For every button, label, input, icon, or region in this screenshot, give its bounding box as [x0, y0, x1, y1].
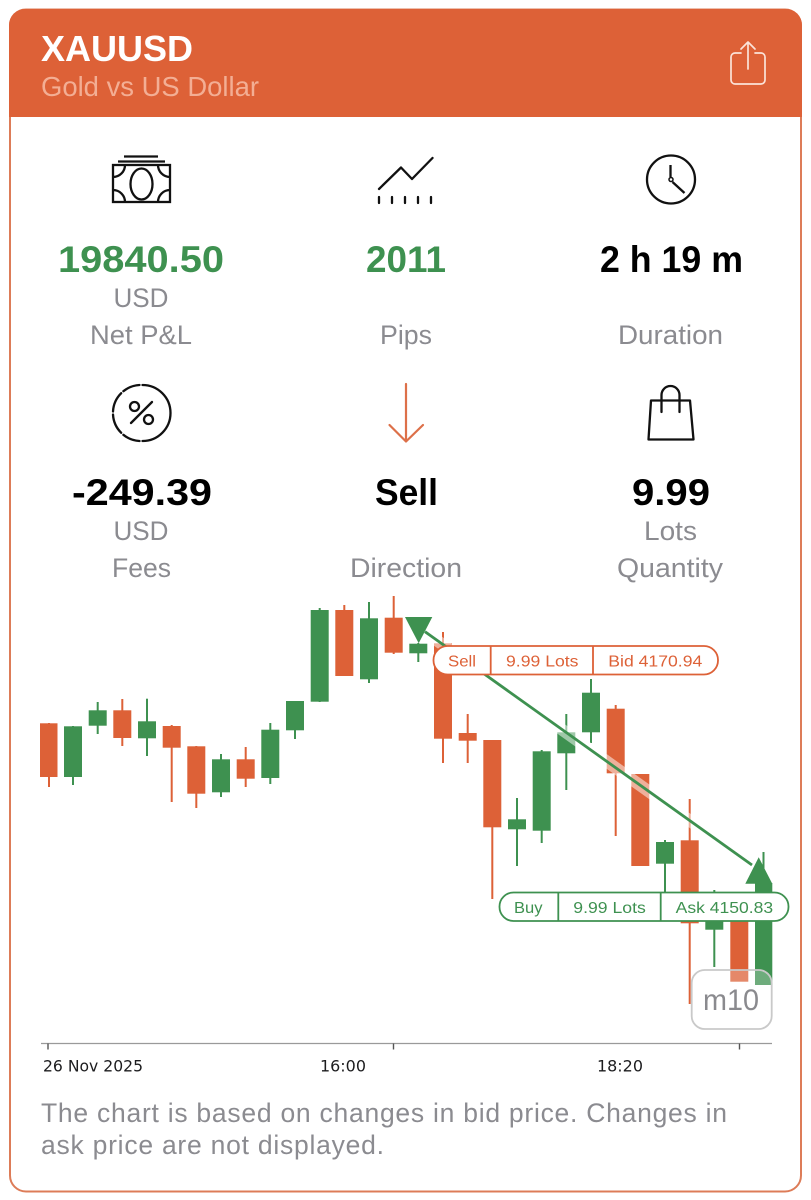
footnote: ask price are not displayed.	[41, 1130, 384, 1160]
time axis: 16:00	[320, 1058, 366, 1076]
metric: direction: Direction	[350, 553, 462, 583]
marker: entry triangle	[405, 617, 432, 643]
label: buy order: 9.99 Lots	[573, 900, 646, 917]
metric: net P&L: USD	[114, 283, 168, 313]
icon: share	[731, 42, 765, 84]
icon: banknote	[113, 156, 170, 202]
metric: quantity: Quantity	[617, 553, 724, 583]
label: sell order: Bid 4170.94	[608, 654, 703, 670]
timeframe badge: m10	[703, 984, 759, 1017]
metric: direction	[350, 472, 462, 583]
time axis: 26 Nov 2025	[43, 1058, 143, 1076]
metric: net P&L: 19840.50	[58, 239, 224, 280]
subtitle: Gold vs US Dollar	[41, 71, 259, 102]
metric: net P&L: Net P&L	[90, 320, 192, 350]
icon: percent	[113, 385, 170, 441]
header band	[9, 9, 802, 117]
metric: direction: Sell	[375, 472, 438, 513]
bullish candles	[64, 602, 772, 985]
label: sell order	[434, 646, 718, 674]
candlestick chart	[40, 596, 788, 1029]
time axis	[41, 1044, 772, 1076]
label: sell order: 9.99 Lots	[506, 654, 579, 670]
label: sell order: Sell	[448, 654, 476, 670]
metric: fees: USD	[114, 516, 168, 546]
label: buy order: Ask 4150.83	[676, 900, 774, 917]
metric: quantity	[617, 472, 724, 583]
metric: quantity: 9.99	[632, 472, 710, 513]
metric: fees	[72, 472, 212, 583]
metric: quantity: Lots	[644, 516, 697, 546]
icon: line chart	[379, 158, 432, 203]
bearish candles	[40, 596, 748, 1004]
trade line highlight	[425, 632, 752, 865]
trade line	[425, 632, 752, 865]
icon: down arrow	[390, 384, 423, 442]
metric: pips	[366, 239, 446, 350]
metric: pips: 2011	[366, 239, 446, 280]
metric: net P&L	[58, 239, 224, 350]
time axis: 18:20	[597, 1058, 643, 1076]
metric: fees: Fees	[112, 553, 171, 583]
icon: shopping bag	[648, 386, 694, 440]
label: buy order: Buy	[514, 900, 543, 917]
footnote	[41, 1098, 727, 1160]
metric: fees: -249.39	[72, 472, 212, 513]
timeframe badge	[692, 970, 772, 1029]
metric: duration: Duration	[618, 320, 723, 350]
label: buy order	[500, 892, 788, 921]
icon: clock	[647, 156, 695, 204]
footnote: The chart is based on changes in bid price. Changes in	[41, 1098, 727, 1128]
marker: exit triangle	[745, 857, 772, 884]
title: XAUUSD	[41, 28, 193, 69]
metric: pips: Pips	[380, 320, 432, 350]
metric: duration: 2 h 19 m	[600, 239, 743, 280]
metric: duration	[600, 239, 743, 350]
